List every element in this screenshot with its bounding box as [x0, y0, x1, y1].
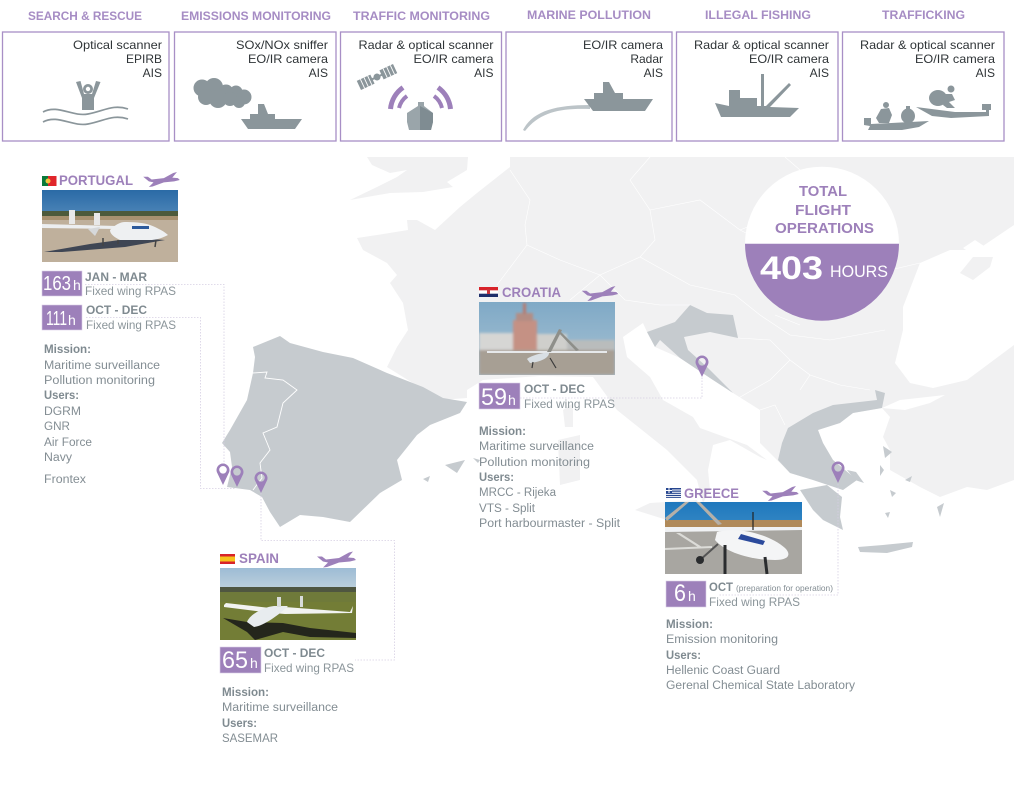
mission and users: Pollution monitoring — [479, 457, 590, 469]
country name: PORTUGAL — [59, 173, 133, 188]
panel: illegal fishing: EO/IR camera — [749, 52, 829, 66]
Iberian peninsula highlighted — [222, 336, 467, 527]
stat: 6 hours — [666, 580, 833, 609]
stat: 65 hours — [220, 646, 354, 675]
country name: GREECE — [684, 486, 739, 501]
stat: 111 hours: h — [68, 312, 76, 328]
mission and users — [222, 687, 338, 745]
panel: trafficking: EO/IR camera — [915, 52, 995, 66]
mission and users: Users: — [222, 718, 257, 730]
mission and users: Mission: — [479, 426, 526, 438]
icon: plane — [317, 552, 356, 568]
panel: marine pollution: Radar — [630, 52, 663, 66]
heading: TRAFFICKING — [882, 8, 965, 22]
stat: 111 hours — [42, 303, 176, 332]
mission and users: SASEMAR — [222, 733, 278, 745]
mission and users — [666, 619, 855, 692]
mission and users: Mission: — [44, 344, 91, 356]
photo: drone by control tower — [479, 302, 615, 375]
heading: SEARCH & RESCUE — [28, 9, 142, 23]
mission and users: Emission monitoring — [666, 634, 778, 646]
panel: search & rescue: AIS — [143, 66, 162, 80]
panel: traffic monitoring: Radar & optical scanner — [358, 38, 494, 52]
panel: illegal fishing — [676, 8, 838, 141]
stat: 59 hours: OCT - DEC — [524, 382, 585, 396]
panel: traffic monitoring: AIS — [474, 66, 494, 80]
icon: plane — [762, 486, 799, 501]
heading: MARINE POLLUTION — [527, 8, 651, 22]
stat: 111 hours: 111 — [46, 308, 67, 330]
icon: satellite — [357, 64, 397, 90]
icon: plane — [582, 286, 618, 301]
photo: drone close-up — [665, 502, 802, 574]
stat: 65 hours: h — [250, 655, 258, 671]
Greece highlighted — [778, 390, 885, 490]
mission and users: Maritime surveillance — [479, 441, 594, 453]
total flight operations badge: OPERATIONS — [775, 221, 874, 237]
stat: 6 hours: (preparation for operation) — [736, 583, 833, 593]
panel: illegal fishing: AIS — [810, 66, 829, 80]
panel: marine pollution: AIS — [644, 66, 663, 80]
total flight operations badge: FLIGHT — [795, 203, 851, 219]
panel: emissions monitoring: AIS — [309, 66, 328, 80]
stat: 59 hours: 59 — [481, 384, 507, 411]
mission and users: Maritime surveillance — [222, 702, 338, 714]
mission and users: DGRM — [44, 406, 81, 418]
mission and users: Gerenal Chemical State Laboratory — [666, 680, 855, 692]
stat: 163 hours: Fixed wing RPAS — [85, 284, 176, 298]
stat: 59 hours — [479, 382, 615, 411]
mission and users: MRCC - Rijeka — [479, 487, 557, 499]
panel: traffic monitoring: EO/IR camera — [414, 52, 494, 66]
stat: 59 hours: h — [508, 392, 516, 408]
mission and users: Navy — [44, 452, 72, 464]
Croatia highlighted — [647, 305, 738, 393]
mission and users: VTS - Split — [479, 503, 536, 515]
panel: trafficking — [842, 8, 1004, 141]
mission and users: Users: — [44, 390, 79, 402]
panel: search & rescue: EPIRB — [126, 52, 162, 66]
map pins — [216, 356, 845, 493]
mission and users: Mission: — [666, 619, 713, 631]
heading: ILLEGAL FISHING — [705, 8, 811, 22]
stat: 59 hours: Fixed wing RPAS — [524, 397, 615, 411]
stat: 6 hours: OCT — [709, 580, 734, 594]
panel: marine pollution — [506, 8, 672, 141]
stat: 6 hours: Fixed wing RPAS — [709, 595, 800, 609]
panel: trafficking: AIS — [976, 66, 995, 80]
photo: drone on airfield — [42, 190, 178, 262]
heading: TRAFFIC MONITORING — [353, 9, 490, 23]
icon: radar waves — [390, 88, 450, 109]
mission and users: Pollution monitoring — [44, 375, 155, 387]
stat: 163 hours: JAN - MAR — [85, 270, 147, 284]
panel: search & rescue: Optical scanner — [73, 38, 162, 52]
panel: trafficking: Radar & optical scanner — [860, 38, 995, 52]
stat: 163 hours — [42, 270, 176, 298]
stat: 65 hours: OCT - DEC — [264, 646, 325, 660]
total flight operations badge: TOTAL — [799, 184, 847, 200]
stat: 65 hours: 65 — [222, 647, 248, 674]
mission and users: GNR — [44, 421, 70, 433]
icon: plane — [143, 172, 180, 187]
flag: Spain — [220, 554, 235, 564]
icon: person in water — [43, 81, 128, 124]
country name: SPAIN — [239, 551, 279, 566]
panel: emissions monitoring — [174, 9, 336, 141]
stat: 6 hours: h — [688, 588, 696, 604]
icon: ship from front — [407, 102, 433, 130]
mission and users — [479, 426, 621, 530]
mission and users: Frontex — [44, 474, 86, 486]
heading: EMISSIONS MONITORING — [181, 9, 331, 23]
icon: ship with oil trail — [523, 82, 653, 131]
flag: Portugal — [42, 176, 56, 186]
total flight operations badge — [745, 167, 899, 321]
country name: CROATIA — [502, 285, 561, 300]
stat: 65 hours: Fixed wing RPAS — [264, 661, 354, 675]
panel: emissions monitoring: SOx/NOx sniffer — [236, 38, 328, 52]
stat: 163 hours: h — [73, 277, 81, 293]
mission and users: Port harbourmaster - Split — [479, 518, 621, 530]
stat: 163 hours: 163 — [43, 273, 71, 295]
stat: 111 hours: OCT - DEC — [86, 303, 147, 317]
icon: smoke cloud and ship — [194, 78, 302, 129]
map of southern Europe — [222, 157, 1014, 553]
dotted connectors from cards to map pins — [85, 284, 838, 660]
photo: drone on grass — [220, 568, 356, 640]
panel: search & rescue — [2, 9, 169, 141]
mission and users: Users: — [666, 650, 701, 662]
panel: illegal fishing: Radar & optical scanner — [694, 38, 829, 52]
mission and users: Users: — [479, 472, 514, 484]
stat: 111 hours: Fixed wing RPAS — [86, 318, 176, 332]
total flight operations badge: 403 — [760, 250, 823, 286]
icon: two boats with smugglers — [864, 86, 991, 130]
stat: 6 hours: 6 — [674, 580, 686, 607]
panel: emissions monitoring: EO/IR camera — [248, 52, 328, 66]
mission and users: Mission: — [222, 687, 269, 699]
panel: traffic monitoring — [340, 9, 502, 141]
mission and users: Maritime surveillance — [44, 360, 160, 372]
card: Portugal — [42, 172, 180, 486]
flag: Croatia — [479, 287, 498, 297]
card: Croatia — [479, 285, 621, 530]
mission and users: Air Force — [44, 437, 92, 449]
card: Spain — [220, 551, 356, 745]
flag: Greece — [666, 488, 681, 498]
mission and users: Hellenic Coast Guard — [666, 665, 780, 677]
mission and users — [44, 344, 160, 486]
total flight operations badge: HOURS — [830, 262, 888, 281]
icon: fishing boat — [715, 74, 799, 117]
card: Greece — [665, 486, 855, 692]
panel: marine pollution: EO/IR camera — [583, 38, 663, 52]
